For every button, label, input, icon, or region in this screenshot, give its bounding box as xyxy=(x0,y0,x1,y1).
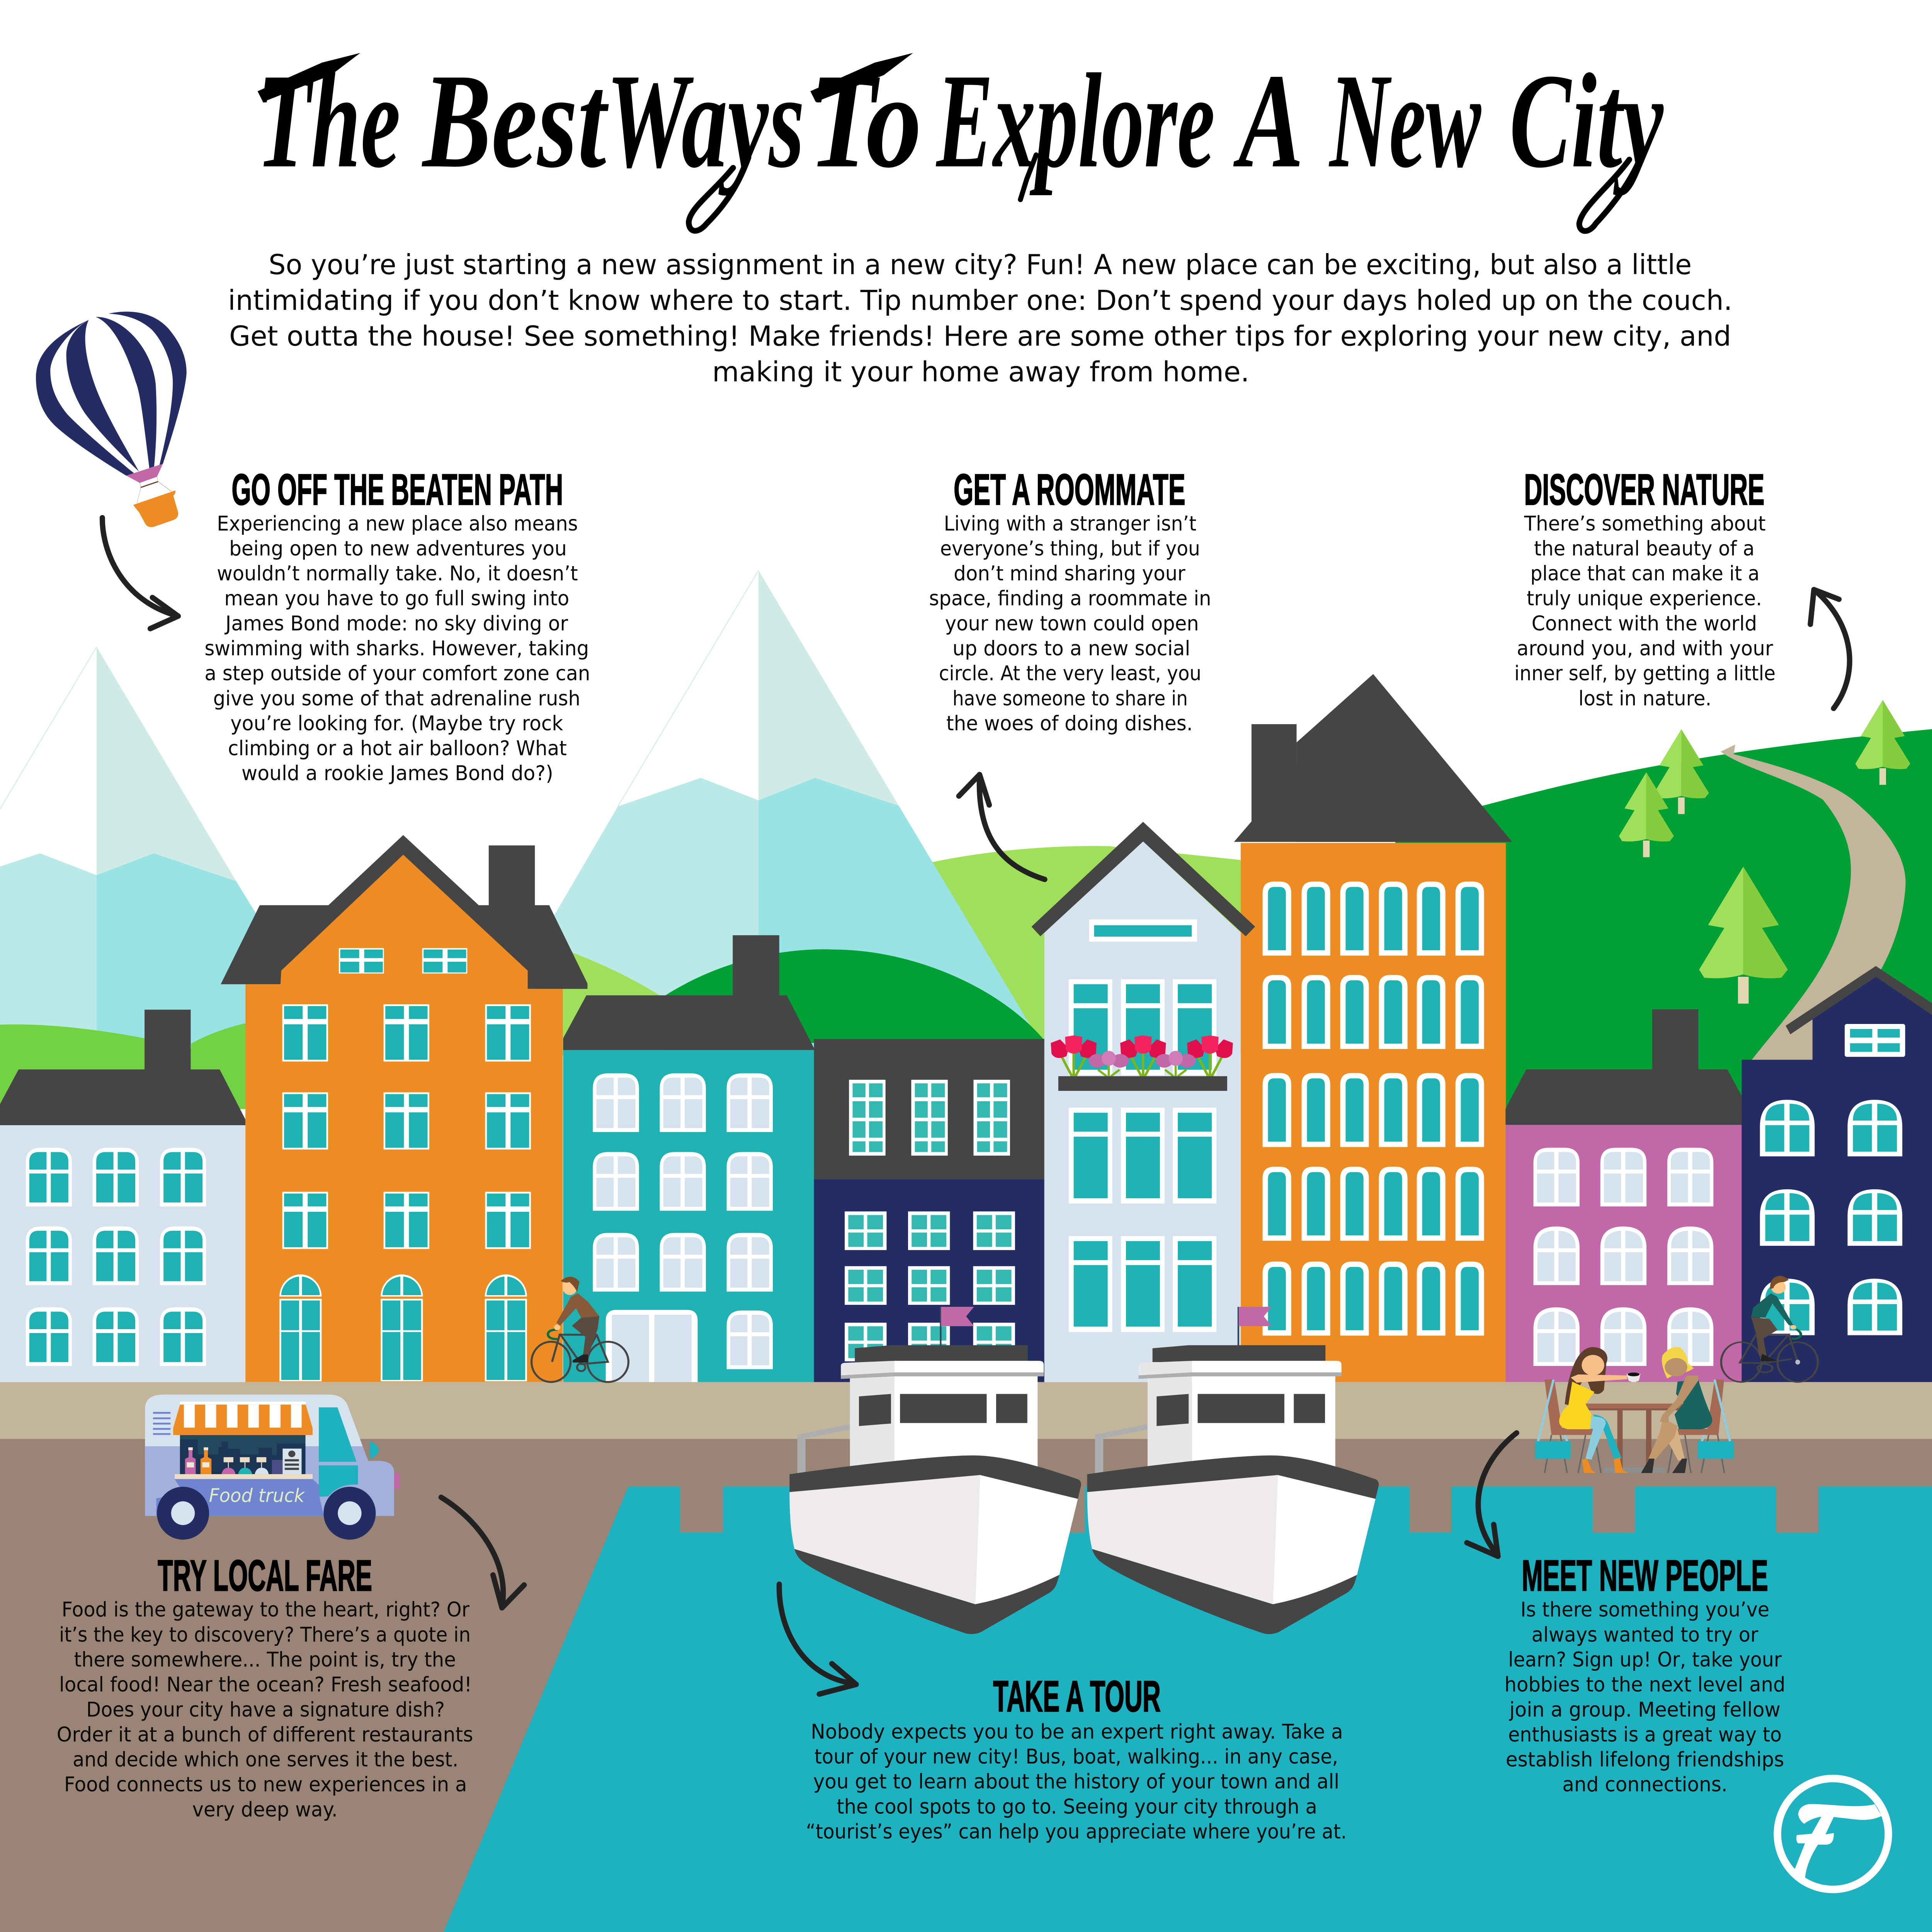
body text xyxy=(806,1720,1347,1844)
table xyxy=(1583,1403,1686,1473)
body text: climbing or a hot air balloon? What xyxy=(228,736,567,760)
section: get a roommate xyxy=(929,465,1211,735)
building: light blue left xyxy=(0,1010,245,1382)
body text: wouldn’t normally take. No, it doesn’t xyxy=(217,562,578,585)
body text: Food is the gateway to the heart, right? Or xyxy=(61,1598,469,1622)
arrow: to meet new people xyxy=(1467,1433,1517,1556)
title xyxy=(256,45,1664,196)
body text: you’re looking for. (Maybe try rock xyxy=(230,712,563,735)
body text: Nobody expects you to be an expert right away. Take a xyxy=(811,1720,1343,1743)
body text: swimming with sharks. However, taking xyxy=(204,637,589,660)
body text: always wanted to try or xyxy=(1532,1623,1759,1646)
body text xyxy=(57,1598,473,1821)
intro paragraph: So you’re just starting a new assignment in a new city? Fun! A new place can be exciting, but also a little xyxy=(269,249,1692,281)
sidewalk xyxy=(0,1382,1932,1439)
arrow: to take a tour xyxy=(779,1584,856,1694)
heading: TRY LOCAL FARE xyxy=(158,1551,372,1600)
left mountain xyxy=(0,647,344,1055)
body text: truly unique experience. xyxy=(1527,587,1762,611)
body text: would a rookie James Bond do?) xyxy=(242,762,553,785)
title: The xyxy=(256,45,400,196)
section: discover nature xyxy=(1514,465,1776,710)
body text xyxy=(1514,512,1776,710)
body text: mean you have to go full swing into xyxy=(224,587,569,611)
food truck xyxy=(145,1395,400,1540)
body text: it’s the key to discovery? There’s a quote in xyxy=(59,1623,471,1646)
ground xyxy=(0,1439,1932,1932)
woman yellow xyxy=(1559,1347,1640,1473)
body text: the natural beauty of a xyxy=(1534,537,1755,561)
heading: GO OFF THE BEATEN PATH xyxy=(231,465,563,514)
trees xyxy=(1619,700,1910,1003)
intro paragraph xyxy=(228,249,1732,388)
title: A xyxy=(1232,45,1304,196)
body text: around you, and with your xyxy=(1517,637,1773,660)
body text: a step outside of your comfort zone can xyxy=(204,662,590,685)
body text: join a group. Meeting fellow xyxy=(1509,1698,1781,1721)
body text: there somewhere... The point is, try the xyxy=(74,1648,456,1672)
building: dark and navy xyxy=(814,1039,1044,1382)
body text: you get to learn about the history of your town and all xyxy=(813,1770,1339,1794)
body text: your new town could open xyxy=(945,612,1199,635)
body text: Connect with the world xyxy=(1532,612,1757,635)
body text: give you some of that adrenaline rush xyxy=(213,687,580,710)
body text: being open to new adventures you xyxy=(229,537,567,561)
flower box xyxy=(1051,1036,1233,1091)
title: Ways xyxy=(606,45,804,196)
women at table xyxy=(1535,1347,1734,1473)
body text: up doors to a new social xyxy=(952,637,1190,660)
body text: lost in nature. xyxy=(1578,687,1711,710)
title: Explore xyxy=(935,45,1215,196)
body text xyxy=(204,512,590,785)
arrow: to go off the beaten path xyxy=(102,518,178,629)
body text: inner self, by getting a little xyxy=(1514,662,1776,685)
woman blonde xyxy=(1641,1347,1712,1473)
title: City xyxy=(1509,45,1664,196)
hills xyxy=(0,729,1932,1145)
heading: DISCOVER NATURE xyxy=(1524,465,1764,514)
body text: learn? Sign up! Or, take your xyxy=(1508,1648,1782,1672)
arrow: to get a roommate xyxy=(959,775,1045,879)
building: navy right xyxy=(1742,966,1932,1382)
logo xyxy=(1777,1779,1888,1889)
body text: There’s something about xyxy=(1524,512,1766,536)
body text: “tourist’s eyes” can help you appreciate where you’re at. xyxy=(806,1820,1347,1844)
body text: Food connects us to new experiences in a xyxy=(64,1773,467,1796)
section: meet new people xyxy=(1505,1551,1786,1796)
body text: enthusiasts is a great way to xyxy=(1508,1723,1782,1747)
heading: TAKE A TOUR xyxy=(993,1672,1161,1721)
body text: space, finding a roommate in xyxy=(929,587,1211,611)
section: go off the beaten path xyxy=(204,465,590,785)
body text: James Bond mode: no sky diving or xyxy=(224,612,568,635)
body text: Does your city have a signature dish? xyxy=(86,1698,445,1721)
building: teal xyxy=(563,935,814,1382)
body text: tour of your new city! Bus, boat, walking... in any case, xyxy=(815,1745,1338,1769)
intro paragraph: Get outta the house! See something! Make friends! Here are some other tips for exploring your new city, and xyxy=(229,320,1731,352)
body text: and connections. xyxy=(1562,1773,1728,1796)
body text: and decide which one serves it the best. xyxy=(73,1748,458,1771)
section: take a tour xyxy=(806,1672,1347,1844)
hot air balloon xyxy=(36,312,187,527)
body text: the cool spots to go to. Seeing your city through a xyxy=(837,1795,1317,1818)
title brush flourishes xyxy=(258,53,1640,231)
building: orange left xyxy=(221,835,587,1382)
section: try local fare xyxy=(57,1551,473,1821)
arrow: to discover nature xyxy=(1810,590,1850,708)
body text: circle. At the very least, you xyxy=(939,662,1201,685)
body text: have someone to share in xyxy=(952,687,1188,710)
title: New xyxy=(1328,45,1481,196)
body text: everyone’s thing, but if you xyxy=(940,537,1200,561)
hill: light green right xyxy=(916,846,1245,1055)
body text xyxy=(929,512,1211,735)
cyclist left xyxy=(532,1277,628,1382)
body text: place that can make it a xyxy=(1530,562,1760,585)
building: pale with flower box xyxy=(1031,822,1255,1382)
body text: the woes of doing dishes. xyxy=(946,712,1193,735)
big mountain xyxy=(472,570,1048,1055)
body text: Order it at a bunch of different restaurants xyxy=(57,1723,473,1747)
body text: very deep way. xyxy=(192,1798,338,1821)
intro paragraph: intimidating if you don’t know where to start. Tip number one: Don’t spend your days holed up on the couch. xyxy=(228,284,1732,316)
truck label: Food truck xyxy=(209,1485,305,1507)
arrow: to try local fare xyxy=(441,1497,524,1608)
body text: don’t mind sharing your xyxy=(954,562,1185,585)
building: pink xyxy=(1505,1009,1742,1382)
cyclist right xyxy=(1721,1276,1818,1382)
body text xyxy=(1505,1598,1786,1796)
body text: local food! Near the ocean? Fresh seafood! xyxy=(59,1673,472,1697)
body text: Is there something you’ve xyxy=(1520,1598,1769,1622)
title: Best xyxy=(421,45,610,196)
chairs xyxy=(1535,1379,1734,1473)
body text: hobbies to the next level and xyxy=(1505,1673,1786,1697)
boat 2 xyxy=(1087,1307,1379,1634)
building: orange tall xyxy=(1234,674,1512,1382)
body text: establish lifelong friendships xyxy=(1506,1748,1784,1771)
body text: Experiencing a new place also means xyxy=(217,512,578,536)
title: To xyxy=(808,45,922,196)
water with piers xyxy=(444,1486,1932,1932)
intro paragraph: making it your home away from home. xyxy=(712,356,1249,388)
heading: GET A ROOMMATE xyxy=(954,465,1185,514)
boat 1 xyxy=(789,1307,1081,1634)
body text: Living with a stranger isn’t xyxy=(944,512,1196,536)
road xyxy=(1721,745,1906,1063)
